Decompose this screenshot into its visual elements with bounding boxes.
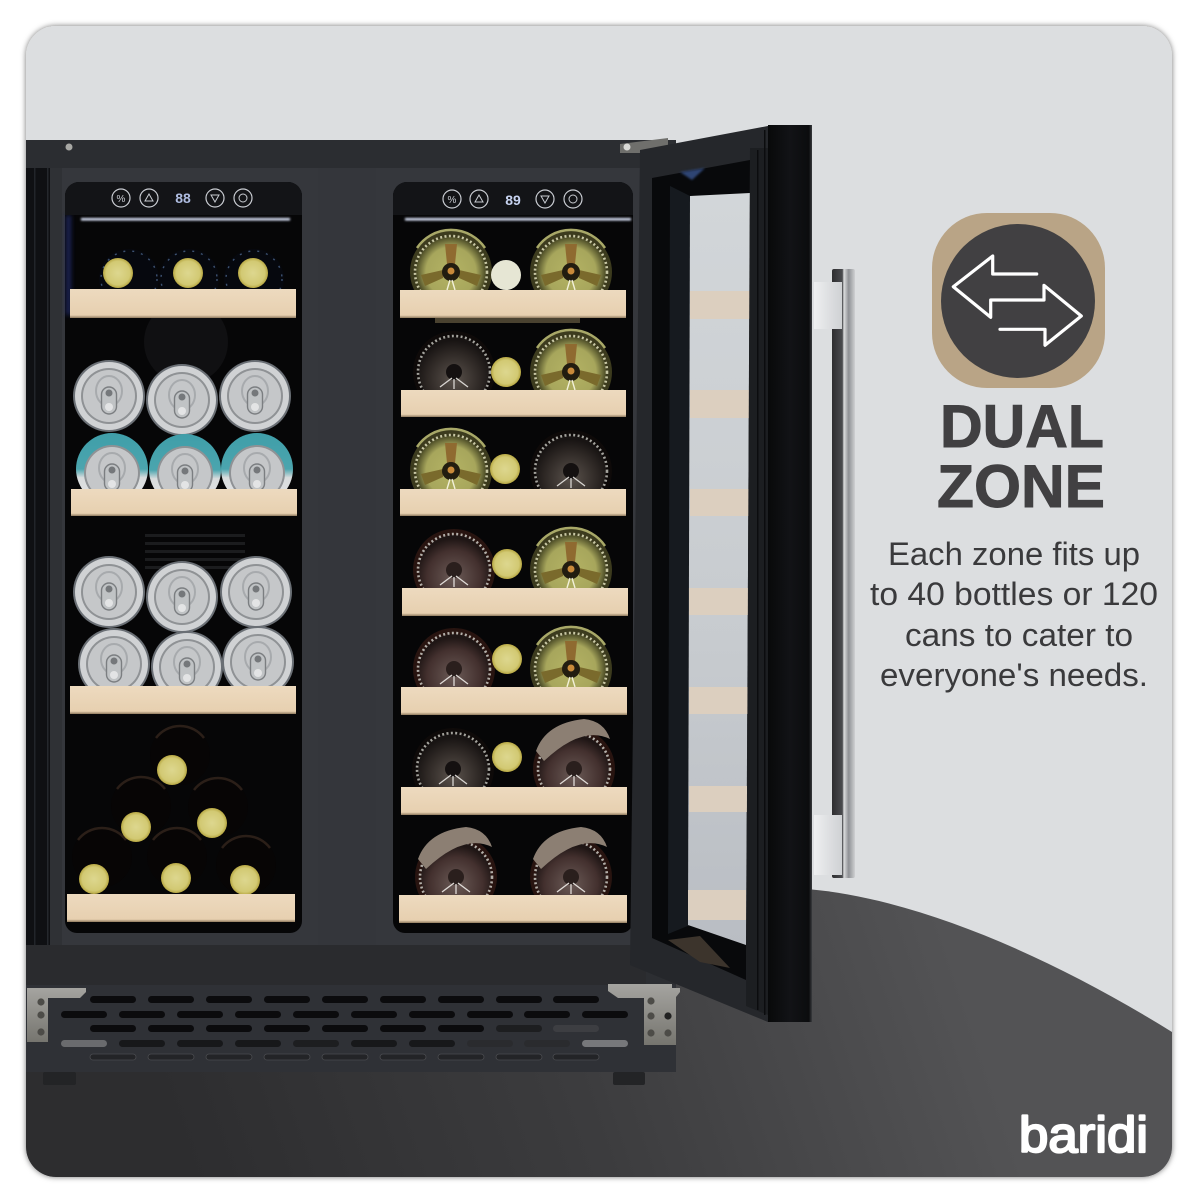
led strip right	[405, 218, 631, 220]
wine bottles right	[410, 230, 615, 918]
control panel right	[393, 182, 633, 215]
control panel left: 88	[175, 190, 191, 206]
baridi logo: baridi	[1019, 1107, 1148, 1163]
bottles top shelf left	[99, 249, 284, 309]
cans lower left	[73, 556, 294, 703]
shelves right	[399, 290, 628, 923]
bottom hinges	[27, 984, 680, 1045]
top hinges	[66, 138, 668, 153]
control panel right: %	[448, 195, 457, 206]
control panel left: %	[117, 194, 126, 205]
control panel left	[65, 182, 302, 215]
control panel right: 89	[505, 192, 521, 208]
heading: DUAL	[940, 393, 1104, 460]
wine fridge	[26, 125, 812, 1085]
door handle	[814, 269, 855, 878]
dual zone icon	[932, 213, 1105, 388]
description: everyone's needs.	[880, 657, 1148, 693]
description	[870, 536, 1158, 693]
shelves left	[67, 289, 297, 922]
description: Each zone fits up	[888, 536, 1140, 572]
left compartment	[65, 182, 302, 933]
open door	[630, 125, 812, 1022]
heading: ZONE	[937, 453, 1105, 520]
description: cans to cater to	[905, 617, 1133, 653]
heading	[937, 393, 1105, 520]
led strip left	[81, 218, 290, 220]
arrows icon	[953, 256, 1081, 345]
right compartment	[393, 182, 633, 933]
small bottle caps right	[490, 260, 522, 772]
door glass	[688, 193, 750, 945]
bottle pyramid left	[72, 725, 276, 895]
cans upper left	[73, 360, 293, 506]
cabinet body	[26, 140, 676, 990]
ventilation grille	[26, 985, 676, 1072]
description: to 40 bottles or 120	[870, 576, 1158, 612]
floor	[26, 888, 1172, 1177]
fridge feet	[43, 1072, 645, 1085]
